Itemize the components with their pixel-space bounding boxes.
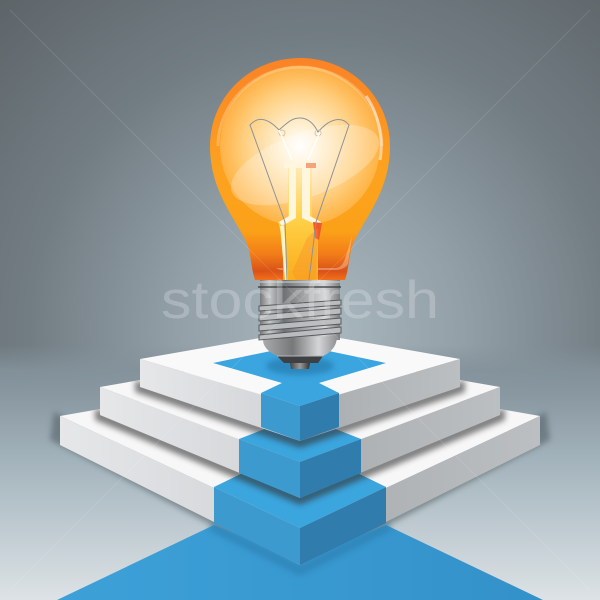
metal screw base (258, 280, 341, 369)
step 2 middle (100, 372, 500, 498)
step 1 top (140, 331, 460, 441)
background wall (0, 0, 600, 420)
steps pyramid (50, 331, 550, 600)
glass stem (278, 163, 322, 280)
filament wires (250, 118, 349, 280)
floor shadow (50, 412, 550, 572)
background floor (0, 345, 600, 600)
rim highlight (218, 67, 382, 146)
carpet shadow (208, 522, 392, 576)
step 3 bottom (60, 402, 540, 565)
bulb contact shadow (266, 357, 334, 375)
step 2 shadow from step 1 (135, 380, 465, 448)
blue carpet (57, 525, 543, 600)
watermark text: stockfresh (161, 271, 439, 330)
light bulb (210, 58, 390, 369)
glass envelope (210, 58, 390, 280)
step 3 shadow from step 2 (95, 408, 505, 505)
